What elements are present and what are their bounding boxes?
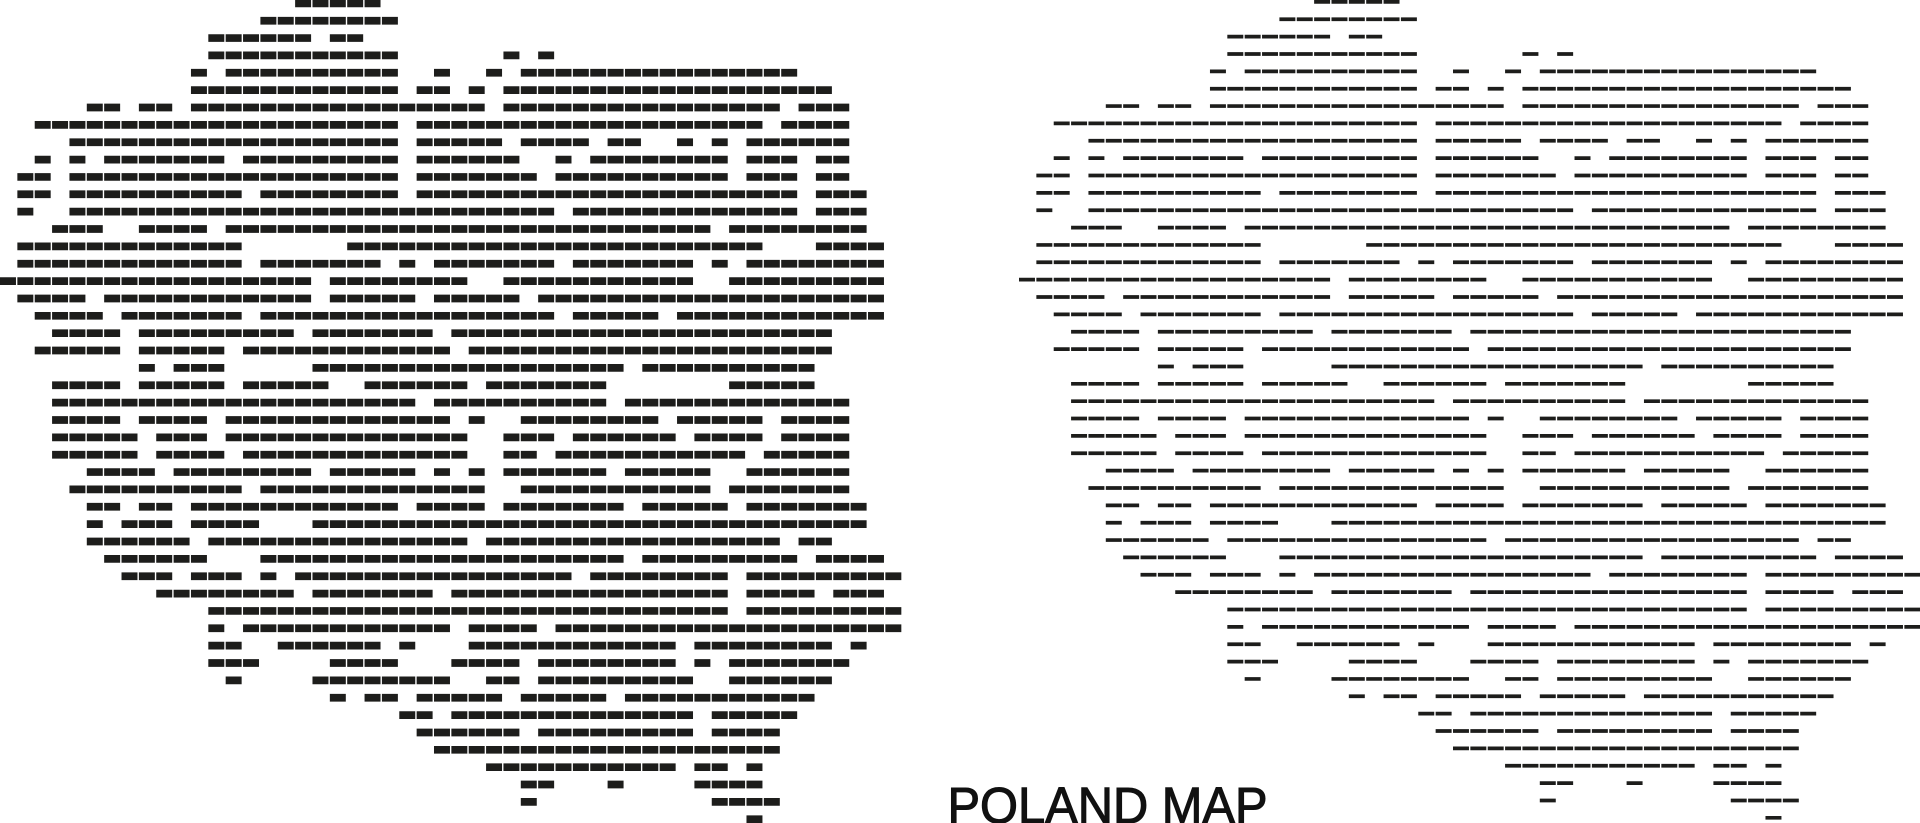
map: Poland thick dashes [0,3,901,819]
map: Poland thin dashes [1019,2,1920,818]
